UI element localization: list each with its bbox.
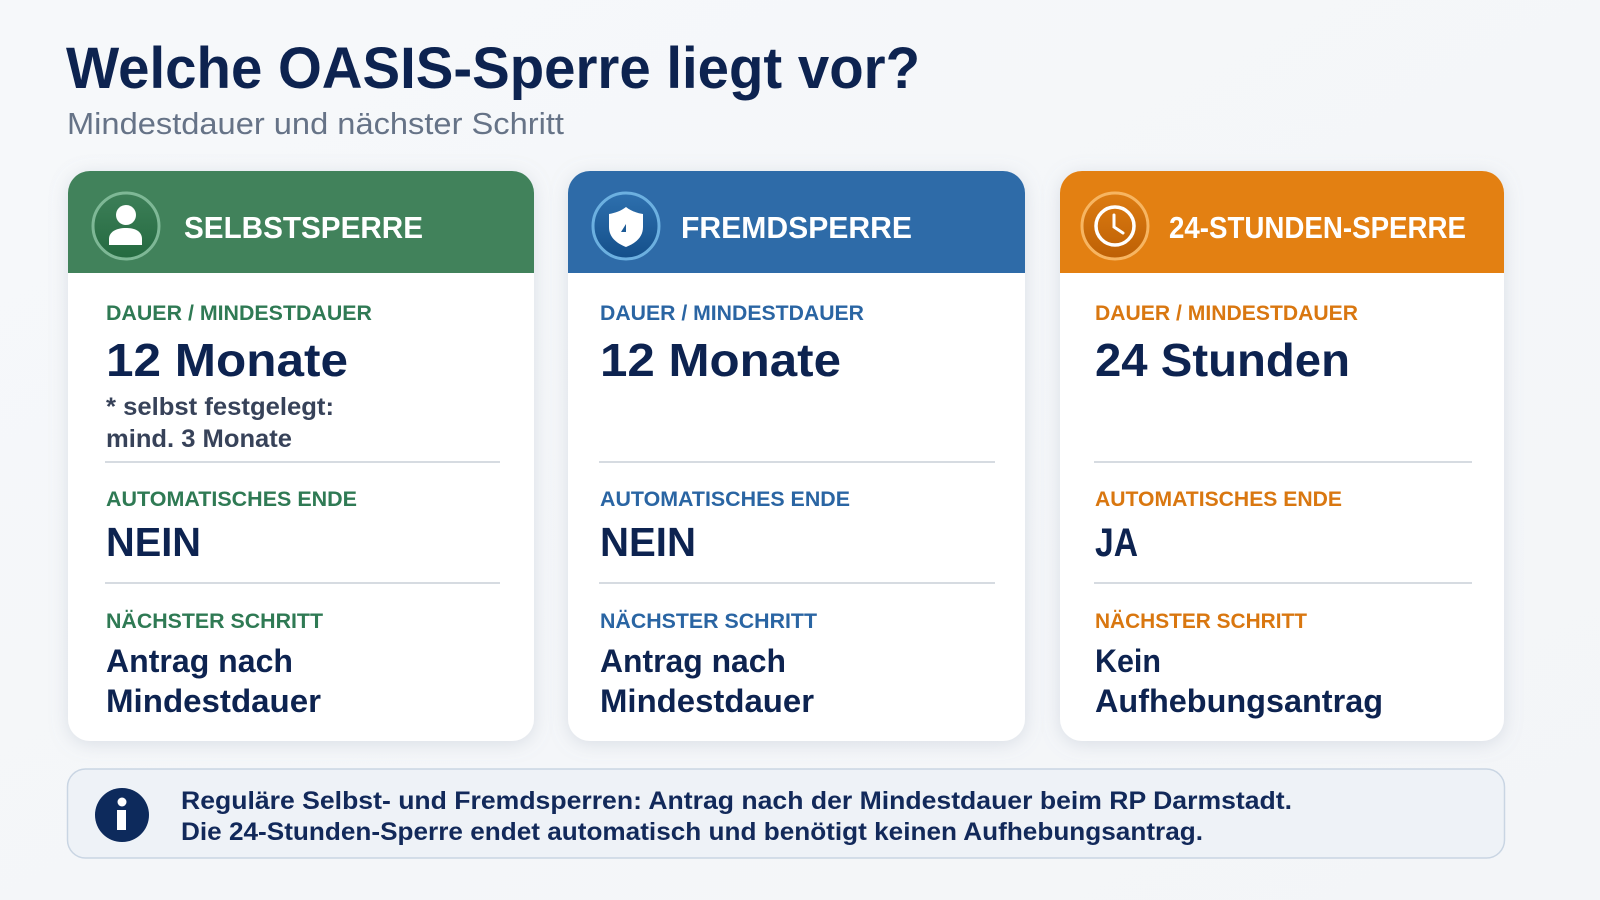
value: Ja: JA xyxy=(1095,521,1138,565)
value: Kein Aufhebungsantrag: Aufhebungsantrag xyxy=(1095,683,1383,719)
value: Nein: NEIN xyxy=(106,519,201,565)
label: Automatisches Ende: AUTOMATISCHES ENDE xyxy=(106,488,357,511)
value: Kein Aufhebungsantrag xyxy=(1095,643,1383,719)
label: Dauer: DAUER / MINDESTDAUER xyxy=(106,302,372,325)
label: Automatisches Ende: AUTOMATISCHES ENDE xyxy=(1095,488,1342,511)
label: Dauer: DAUER / MINDESTDAUER xyxy=(1095,302,1358,325)
text: note line 1: Reguläre Selbst- und Fremdsperren: Antrag nach der Mindestdauer beim RP Darmstadt. xyxy=(181,787,1292,815)
value: Nein: NEIN xyxy=(600,519,696,565)
value: Antrag nach Mindestdauer xyxy=(600,643,814,719)
heading: Selbstsperre: SELBSTSPERRE xyxy=(184,210,423,245)
value: Antrag nach Mindestdauer: Antrag nach xyxy=(600,643,786,679)
heading: 24-Stunden-Sperre: 24-STUNDEN-SPERRE xyxy=(1169,210,1466,245)
value: 12 Monate: 12 Monate xyxy=(106,334,348,386)
icon: shield xyxy=(593,193,659,259)
label: Automatisches Ende: AUTOMATISCHES ENDE xyxy=(600,488,850,511)
panel: 24-Stunden-Sperre xyxy=(1060,171,1504,741)
value: 24 Stunden: 24 Stunden xyxy=(1095,334,1350,386)
header: Selbstsperre xyxy=(68,171,534,273)
value: Antrag nach Mindestdauer: Mindestdauer xyxy=(600,683,814,719)
title: Welche OASIS-Sperre liegt vor? xyxy=(66,36,920,101)
note: mind. 3 Monate: mind. 3 Monate xyxy=(106,425,292,453)
panel: Selbstsperre xyxy=(68,171,534,741)
callout: info note xyxy=(68,769,1504,858)
icon: info xyxy=(95,788,149,842)
value: Antrag nach Mindestdauer: Antrag nach xyxy=(106,643,293,679)
panel: Fremdsperre xyxy=(568,171,1025,741)
value: Antrag nach Mindestdauer: Mindestdauer xyxy=(106,683,321,719)
text: note line 2: Die 24-Stunden-Sperre endet automatisch und benötigt keinen Aufhebungsantrag. xyxy=(181,818,1203,846)
value: 12 Monate: 12 Monate xyxy=(600,334,841,386)
header: 24-Stunden-Sperre xyxy=(1060,171,1504,273)
header: Fremdsperre xyxy=(568,171,1025,273)
label: Nächster Schritt: NÄCHSTER SCHRITT xyxy=(106,610,323,633)
label: Nächster Schritt: NÄCHSTER SCHRITT xyxy=(600,610,817,633)
label: Nächster Schritt: NÄCHSTER SCHRITT xyxy=(1095,610,1307,633)
value: Kein Aufhebungsantrag: Kein xyxy=(1095,643,1161,679)
value: Antrag nach Mindestdauer xyxy=(106,643,321,719)
heading: Fremdsperre: FREMDSPERRE xyxy=(681,210,912,245)
icon: person xyxy=(93,193,159,259)
label: Dauer: DAUER / MINDESTDAUER xyxy=(600,302,864,325)
subtitle: Mindestdauer und nächster Schritt xyxy=(67,106,564,141)
note: selbst festgelegt: * selbst festgelegt: xyxy=(106,393,334,421)
icon: clock xyxy=(1082,193,1148,259)
